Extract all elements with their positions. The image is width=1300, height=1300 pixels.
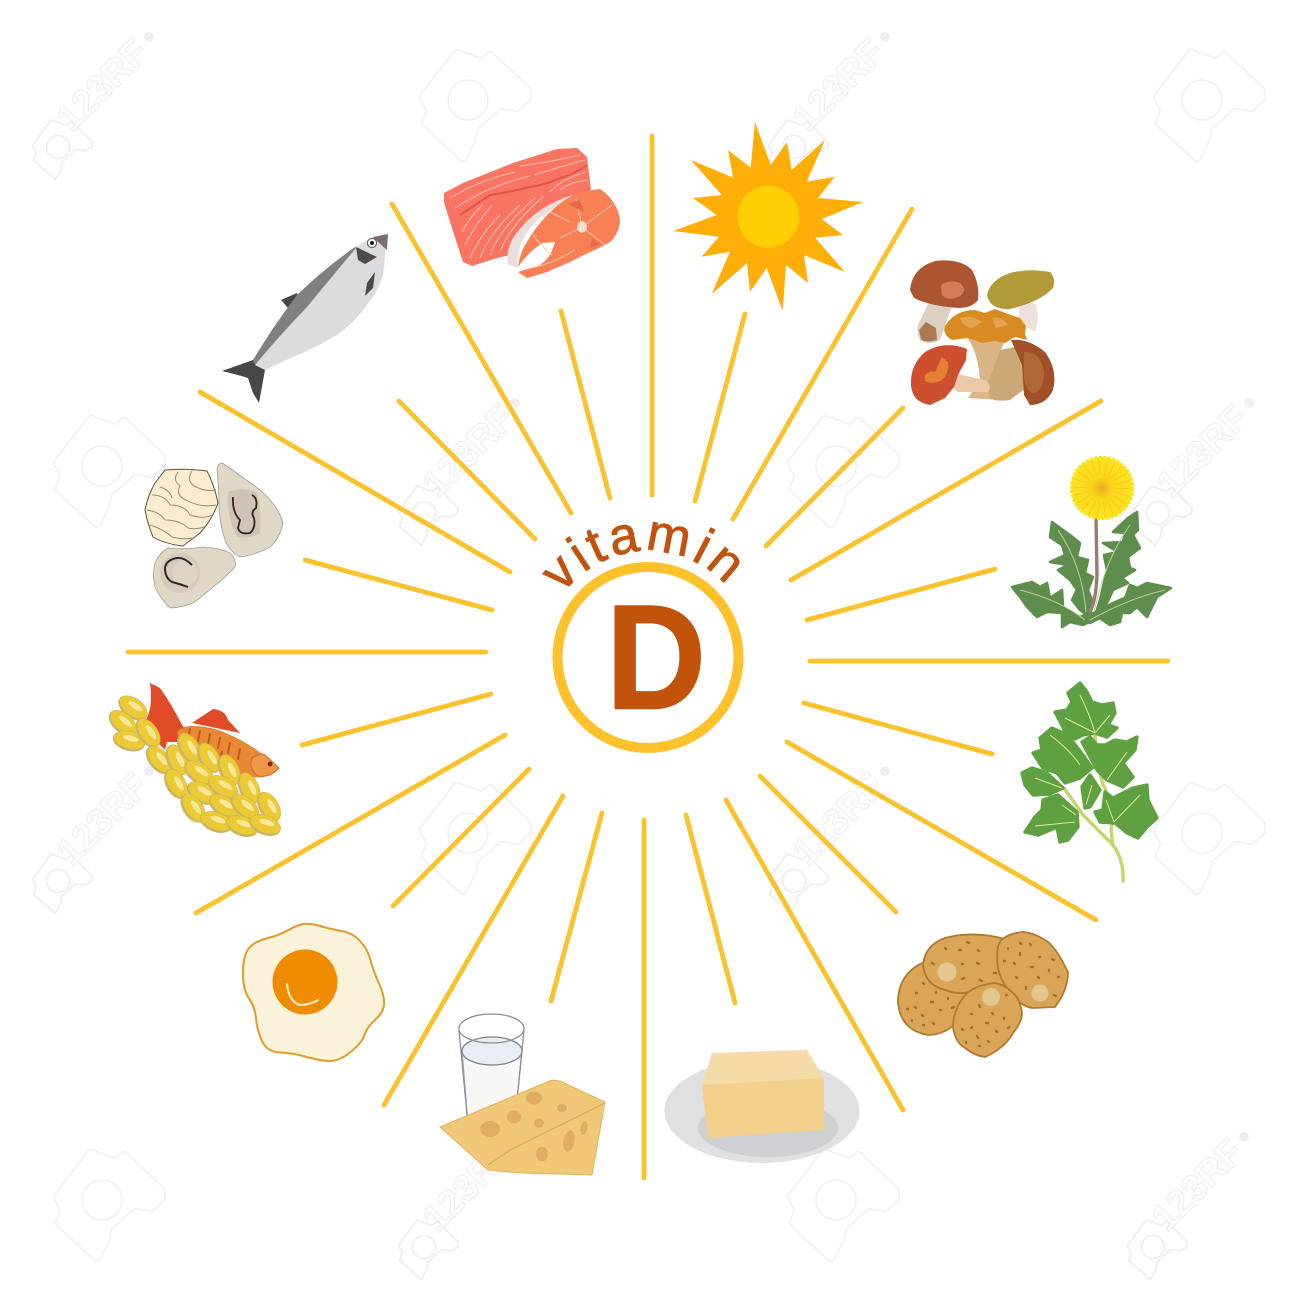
watermarks: 123RF — [415, 397, 522, 505]
body — [255, 235, 388, 370]
skin strip — [507, 191, 590, 268]
watermarks: 123RF — [785, 765, 892, 873]
icon: goldfish with fish oil capsules — [104, 683, 286, 841]
watermarks: 123RF — [415, 1131, 522, 1239]
cheese — [440, 1080, 605, 1175]
ring — [558, 567, 738, 748]
icon: salmon — [444, 148, 620, 278]
back band — [253, 247, 356, 365]
icon: sun — [673, 122, 863, 311]
icon: potatoes — [898, 932, 1068, 1057]
watermarks: 123RF — [1149, 397, 1256, 505]
icon: dandelion — [1012, 457, 1171, 627]
icon: parsley — [1022, 683, 1157, 881]
watermarks: 123RF — [1144, 1131, 1251, 1239]
icon: milk glass and cheese — [440, 1014, 605, 1175]
icon: fish — [222, 234, 388, 403]
watermarks: 123RF — [49, 31, 156, 139]
tail — [222, 360, 265, 403]
watermarks: 123RF — [785, 31, 892, 139]
stems — [1064, 735, 1123, 881]
centre badge: vitamin D — [542, 522, 744, 753]
letter D: D — [606, 575, 706, 741]
heading: vitamin: vitamin — [542, 522, 740, 586]
dorsal fin — [281, 293, 300, 308]
icon: butter on plate — [664, 1050, 860, 1163]
icon: oysters — [145, 463, 283, 608]
icon: fried egg — [243, 924, 384, 1061]
steak — [518, 189, 620, 278]
radiating rays — [128, 136, 1168, 1178]
watermarks: 123RF — [49, 765, 156, 873]
icon: mushrooms — [910, 260, 1054, 405]
flower — [1071, 457, 1133, 519]
stem — [1090, 518, 1097, 612]
